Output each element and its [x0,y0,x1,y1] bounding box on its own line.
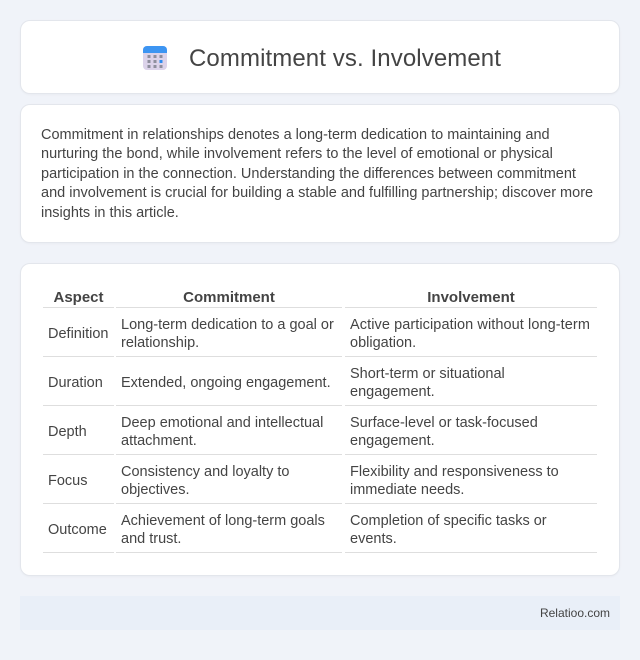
intro text: Commitment in relationships denotes a long-term dedication to maintaining and [41,126,550,142]
row: Depth: engagement. [350,433,435,449]
title: Commitment vs. Involvement [189,45,501,72]
row: Definition: Definition [48,326,108,342]
row: Outcome [43,513,597,553]
row: Depth: attachment. [121,433,197,449]
row: Focus: immediate needs. [350,482,464,498]
row: Duration [43,366,597,406]
row: Outcome: Achievement of long-term goals [121,513,325,529]
row: Outcome: events. [350,531,397,547]
row: Depth [43,415,597,455]
row: Depth: Surface-level or task-focused [350,415,538,431]
row: Duration: engagement. [350,384,435,400]
table header [43,289,597,308]
intro text: participation in the connection. Understanding the differences between commitment [41,166,576,182]
footer text: Relatioo.com [540,606,610,620]
row: Focus: objectives. [121,482,190,498]
intro text: and involvement is crucial for building a stable and fulfilling partnership; discover more [41,185,593,201]
row: Outcome: Outcome [48,522,107,538]
row: Focus: Focus [48,473,88,489]
row: Focus [43,464,597,504]
row: Duration: Duration [48,375,103,391]
table header: Involvement [427,289,515,306]
table header: Aspect [53,289,104,306]
row: Definition [43,317,597,357]
row: Definition: Active participation without long-term [350,317,590,333]
icon: calendar [143,46,167,70]
intro panel [20,104,620,243]
row: Definition: obligation. [350,335,416,351]
footer bar [20,596,620,630]
intro text [41,126,593,220]
intro text: insights in this article. [41,204,179,220]
row: Definition: relationship. [121,335,199,351]
title panel [20,20,620,94]
intro text: nurturing the bond, while involvement refers to the level of emotional or physical [41,146,553,162]
row: Depth: Deep emotional and intellectual [121,415,323,431]
row: Definition: Long-term dedication to a goal or [121,317,334,333]
row: Focus: Flexibility and responsiveness to [350,464,559,480]
row: Duration: Short-term or situational [350,366,505,382]
comparison table panel [20,263,620,576]
row: Focus: Consistency and loyalty to [121,464,289,480]
row: Depth: Depth [48,424,87,440]
table header: Commitment [183,289,275,306]
row: Outcome: Completion of specific tasks or [350,513,547,529]
row: Duration: Extended, ongoing engagement. [121,375,331,391]
row: Outcome: and trust. [121,531,181,547]
